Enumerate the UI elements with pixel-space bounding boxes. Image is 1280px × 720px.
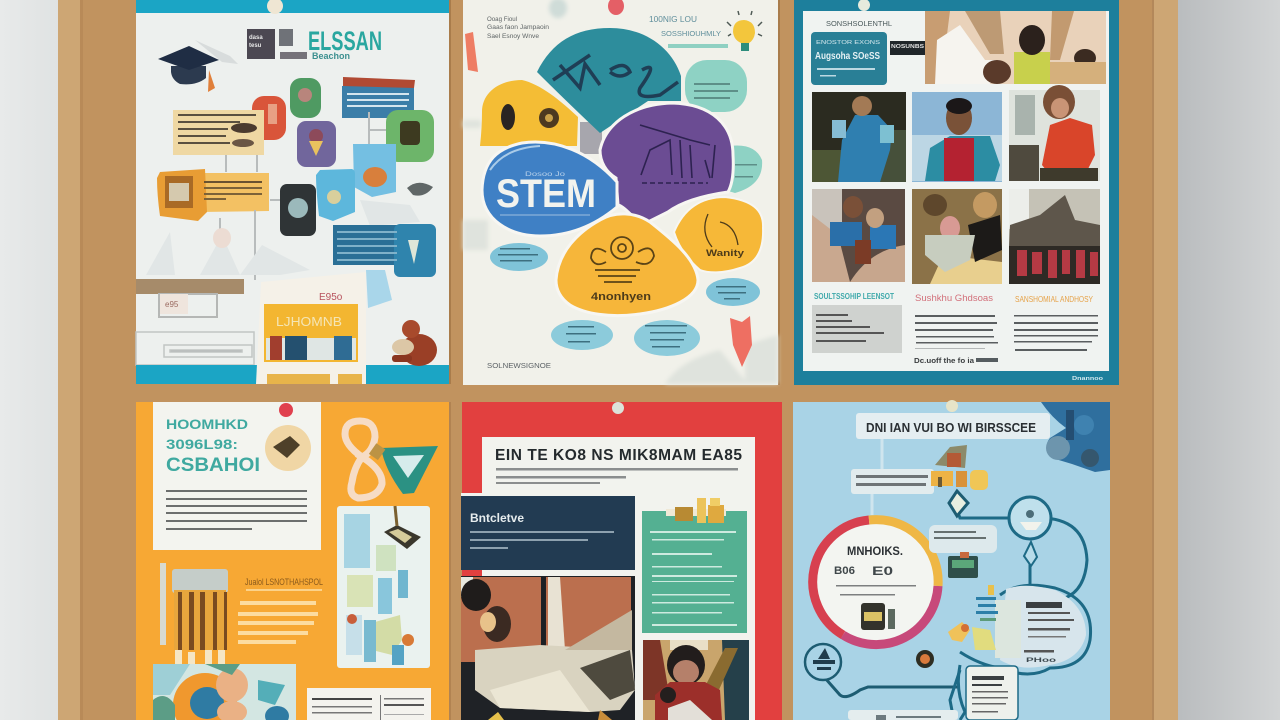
title: ELSSAN bbox=[308, 26, 382, 56]
coral flame bbox=[730, 316, 752, 367]
shelf label bbox=[159, 294, 217, 317]
icon: yellow cards bbox=[931, 470, 988, 490]
orange panel text: Jualol LSNOTHAHSPOL bbox=[245, 577, 323, 587]
cream tab panel: LJHOMNB bbox=[276, 314, 342, 329]
photo: boy with stripes bbox=[643, 640, 749, 720]
faint washes bbox=[463, 0, 778, 384]
bubble: text cloud bbox=[1000, 586, 1086, 668]
title text: HOOMHKD bbox=[166, 416, 248, 432]
panel: colourful abstract bbox=[153, 664, 296, 720]
coral shape top bbox=[608, 0, 624, 15]
icon: orange medallion bbox=[916, 650, 934, 668]
bubble: teal bbox=[537, 28, 681, 133]
bubble: mint top right bbox=[685, 60, 747, 112]
bubble: orange large: 4nonhyen bbox=[591, 291, 651, 303]
poster: bottom left orange bbox=[136, 402, 451, 720]
badge: purple ice cream bbox=[297, 121, 336, 167]
gray square bbox=[580, 122, 602, 154]
badge: green jar bbox=[386, 110, 434, 162]
footer mark: Dnannoo bbox=[1072, 376, 1104, 382]
bubble: pale blue right bbox=[706, 278, 760, 306]
icon: building bbox=[935, 445, 967, 468]
photo: top banner bbox=[925, 11, 1106, 84]
poster: top left education infographic bbox=[136, 0, 451, 384]
icon: comb machine bbox=[160, 563, 228, 664]
shelf label: e95 bbox=[165, 300, 179, 309]
badge: blue scene bbox=[316, 169, 355, 221]
title badges: dasa bbox=[249, 35, 263, 41]
panel: green list bbox=[642, 511, 747, 633]
small text above STEM: Dosoo Jo bbox=[525, 172, 566, 178]
column heading: pink: Sushkhu Ghdsoas bbox=[915, 293, 994, 303]
donut ring: E0 bbox=[872, 564, 893, 578]
icon: graduation cap bbox=[158, 40, 238, 92]
bubble: text cloud: PHoo bbox=[1026, 658, 1057, 664]
panel: blue text list bbox=[342, 77, 415, 118]
column: right text bbox=[1014, 315, 1098, 351]
bubble: mint right bbox=[725, 146, 762, 193]
dark blue corner illustration bbox=[1041, 402, 1110, 472]
badge: red bbox=[252, 96, 286, 140]
header text left: Sael Esnoy Wnve bbox=[487, 33, 539, 40]
photo: woman in red on sky bbox=[912, 92, 1002, 182]
badge: green creature bbox=[290, 78, 321, 118]
title: EIN TE KO8 NS MIK8MAM EA85 bbox=[495, 447, 742, 464]
circle icon: boat bbox=[1009, 497, 1051, 539]
decorative white connectors bbox=[872, 439, 882, 515]
photo: woman in orange lab bbox=[1009, 85, 1100, 181]
footer text: SOLNEWSIGNOE bbox=[487, 361, 551, 370]
column: centre text: Dc.uoff the fo ia bbox=[914, 358, 974, 365]
icon: yellow patches bbox=[948, 622, 996, 650]
teal title card: Augsoha SOeSS bbox=[815, 51, 880, 62]
teal title card bbox=[811, 32, 887, 85]
column: gray card bbox=[812, 305, 902, 353]
icon: golden buildings bbox=[666, 498, 726, 523]
STEM title: STEM bbox=[496, 172, 596, 216]
photo: red bars bbox=[1009, 189, 1100, 284]
teal title card: ENOSTOR EXONS bbox=[816, 40, 881, 46]
brown shelf bbox=[136, 279, 244, 294]
pin bbox=[946, 400, 958, 412]
icon: stacked device bbox=[861, 603, 895, 630]
subtitle lines bbox=[496, 468, 738, 470]
top band bbox=[136, 0, 449, 13]
header text right bbox=[649, 15, 728, 48]
icon: green chest bbox=[948, 552, 978, 578]
info box: bottom bbox=[848, 710, 958, 720]
header text left bbox=[487, 16, 549, 40]
column: centre text bbox=[914, 315, 998, 365]
title text bbox=[166, 416, 260, 476]
photo: group in blue bbox=[812, 189, 905, 282]
diamond icon: middle bbox=[1024, 542, 1037, 566]
header caption: SONSHSOLENTHL bbox=[826, 21, 892, 28]
info box: bottom right bbox=[966, 666, 1018, 720]
cream tab panel: E95o bbox=[319, 292, 343, 303]
bubble: orange large bbox=[556, 214, 698, 316]
body lines bbox=[166, 490, 307, 530]
panel: white title card bbox=[153, 402, 321, 550]
bubble: purple bbox=[600, 103, 733, 225]
subtitle: Beachon bbox=[312, 51, 350, 61]
panel: white header bbox=[482, 437, 755, 720]
badge: light blue heart bbox=[353, 144, 396, 197]
column heading: teal: SOULTSSOHIP LEENSOT bbox=[814, 292, 894, 301]
info box: top bbox=[851, 469, 934, 494]
icon: lightbulb bbox=[727, 11, 762, 51]
title banner: DNI IAN VUI BO WI BIRSSCEE bbox=[866, 421, 1036, 435]
pale sketch shapes bbox=[146, 200, 420, 275]
poster: bottom right blue flowchart bbox=[793, 400, 1110, 720]
donut heading: MNHOIKS. bbox=[847, 544, 903, 558]
poster: top right photo collage bbox=[794, 0, 1119, 385]
header text left: Gaas faon Jampaoin bbox=[487, 24, 549, 31]
title text: 3096L98: bbox=[166, 436, 238, 452]
diamond icon: top bbox=[949, 491, 968, 516]
icon: blue stack bbox=[976, 585, 998, 621]
info box: mid bbox=[929, 525, 997, 553]
poster: centre STEM bubbles bbox=[463, 0, 780, 385]
title banner bbox=[856, 413, 1050, 439]
icon: teal triangle bbox=[369, 443, 438, 494]
photo: crowd bbox=[912, 189, 1002, 284]
cream tab panel bbox=[256, 272, 366, 384]
poster: bottom centre red bbox=[461, 402, 782, 720]
panel: beige note bbox=[173, 110, 264, 155]
gray form bbox=[136, 332, 254, 365]
icon: gray leaf bbox=[407, 183, 433, 196]
small dark tag: NOSUNBS bbox=[891, 44, 924, 50]
light blue bag bbox=[366, 270, 392, 308]
title badges bbox=[247, 29, 307, 59]
header text right: 100NIG LOU bbox=[649, 15, 697, 24]
pale column panel bbox=[995, 600, 1021, 658]
column heading: orange: SANSHOMIAL ANDHOSY bbox=[1015, 295, 1094, 304]
title badges: tesu bbox=[249, 43, 262, 49]
bubble: yellow left bbox=[480, 80, 578, 146]
bubble: pale blue bottom right bbox=[634, 320, 700, 356]
pin bbox=[267, 0, 283, 14]
panel: white text card bbox=[307, 688, 431, 720]
bottom band bbox=[136, 365, 449, 384]
panel: pale map bbox=[337, 506, 430, 668]
icon: tan seal bbox=[265, 425, 311, 471]
circle icon: ship bbox=[805, 644, 841, 680]
navy heading: Bntcletve bbox=[470, 511, 524, 525]
icon: brown animal bbox=[392, 320, 437, 366]
figure-eight shape bbox=[345, 421, 382, 498]
panel: navy objective bbox=[461, 493, 636, 570]
header text right: SOSSHIOUHMLY bbox=[661, 29, 721, 38]
donut ring bbox=[813, 520, 938, 645]
pin bbox=[612, 402, 624, 414]
photo: workshop table bbox=[461, 576, 635, 720]
panel: yellow note bbox=[157, 169, 269, 221]
bubble: orange small: Wanity bbox=[706, 248, 744, 258]
coral shape left bbox=[465, 32, 478, 72]
flow lines bbox=[825, 510, 1091, 720]
orange panel text bbox=[238, 577, 323, 644]
bubble: pale blue left bbox=[490, 243, 548, 271]
donut values: B06 bbox=[834, 565, 855, 577]
small dark tag bbox=[890, 41, 925, 55]
panel: blue striped bbox=[333, 224, 436, 277]
photo: person in blue bbox=[812, 92, 906, 182]
bubble: blue STEM bbox=[482, 142, 617, 236]
pin bbox=[279, 403, 293, 417]
icon: dark tag bbox=[384, 506, 421, 549]
badge: dark tablet bbox=[280, 184, 316, 236]
bubble: orange small bbox=[674, 197, 763, 272]
connector lines bbox=[220, 112, 386, 280]
title text: CSBAHOI bbox=[166, 455, 260, 476]
bubble: pale blue bottom left bbox=[551, 320, 613, 350]
header text left: Ooag Fioul bbox=[487, 16, 518, 23]
pin bbox=[858, 0, 870, 11]
